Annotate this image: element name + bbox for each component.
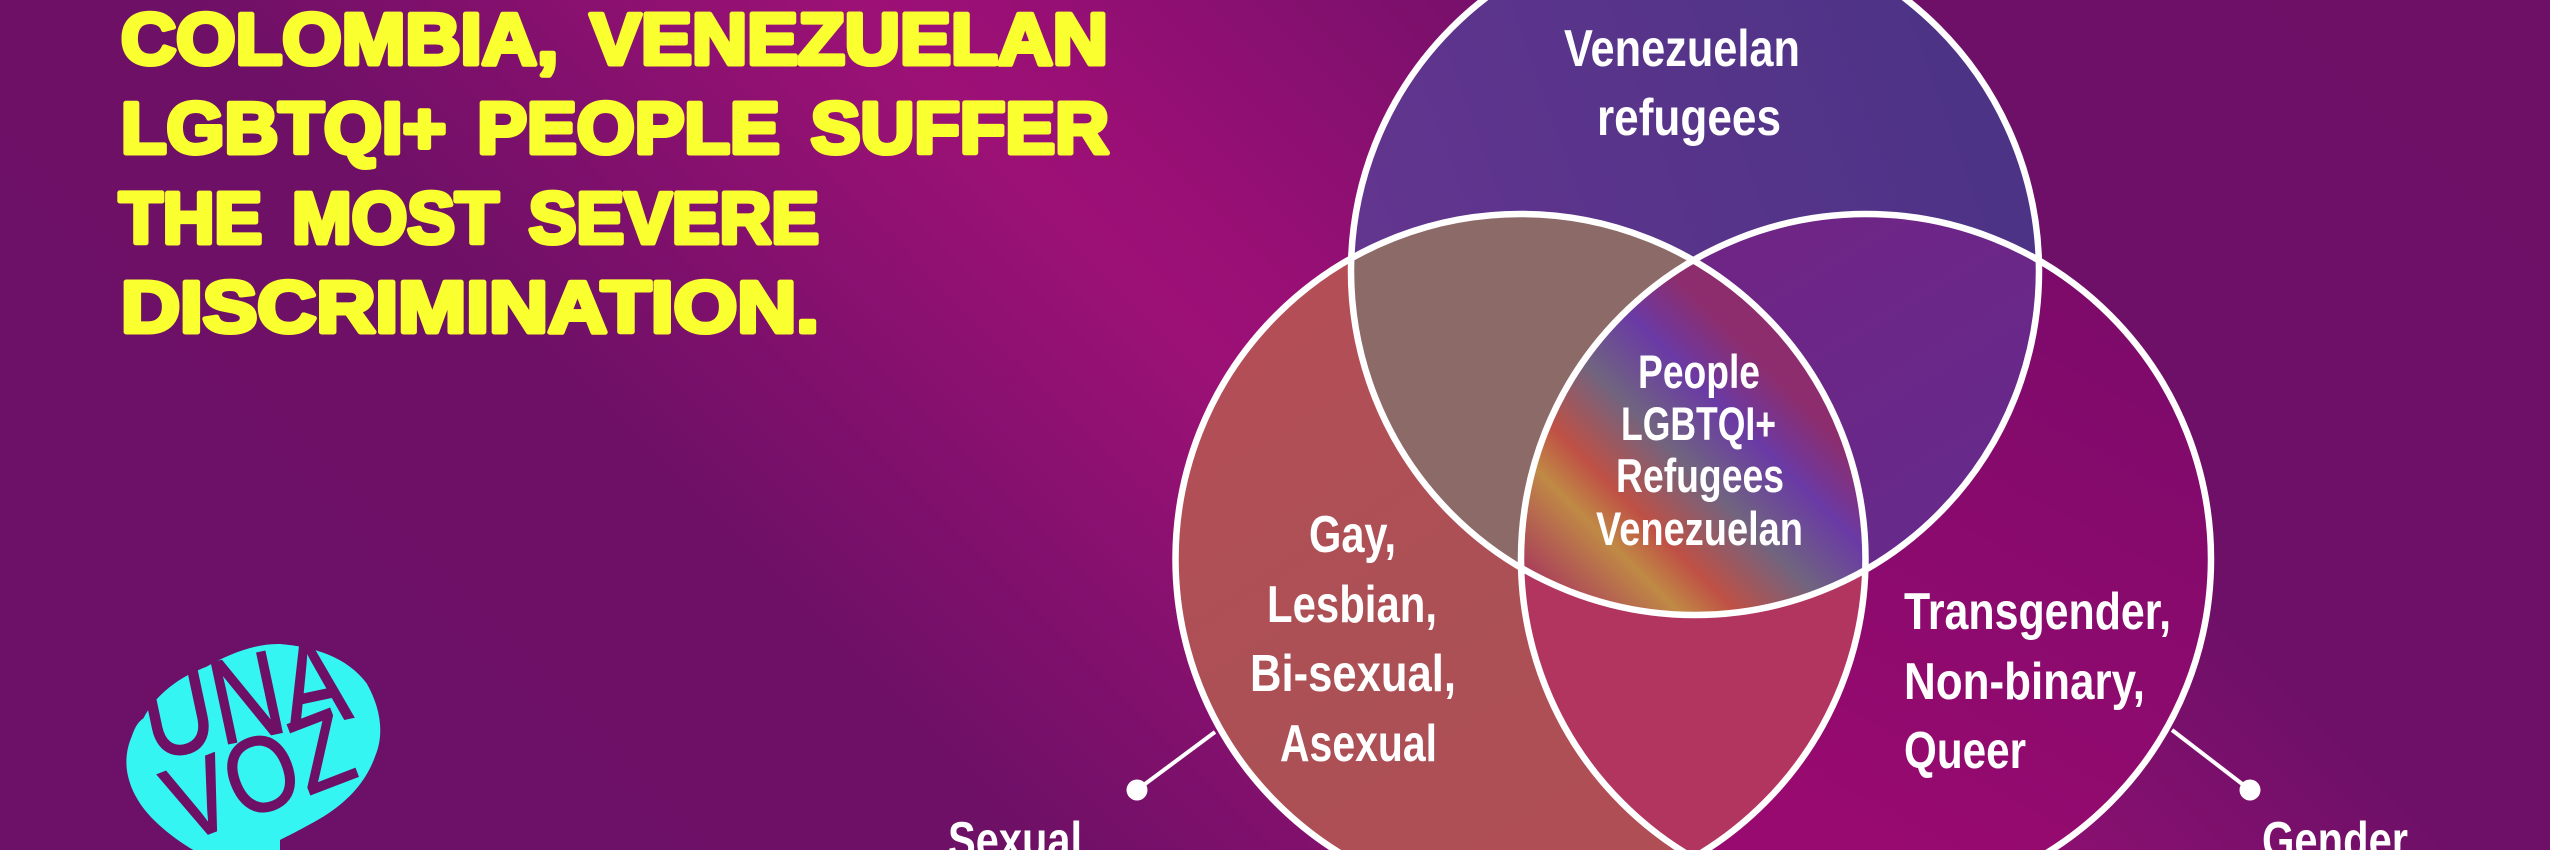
label: centre intersection: People <box>1638 345 1760 398</box>
label: sexual orientation groups <box>1250 506 1456 773</box>
circle outlines <box>1176 0 2211 850</box>
label: Venezuelan refugees <box>1564 20 1800 147</box>
circle: Venezuelan refugees <box>1354 0 2036 256</box>
callout: sexual orientation leader <box>948 732 1215 850</box>
title: headline: COLOMBIA, VENEZUELAN <box>121 0 1108 80</box>
label: sexual orientation groups: Asexual <box>1280 715 1437 773</box>
callout: gender leader <box>2172 730 2408 850</box>
label: gender identity groups: Transgender, <box>1904 583 2171 641</box>
label: Venezuelan refugees: Venezuelan <box>1564 20 1800 78</box>
venn diagram <box>1172 0 2214 850</box>
label: gender identity groups <box>1904 583 2171 780</box>
label: Venezuelan refugees: refugees <box>1597 89 1781 147</box>
label: gender identity groups: Non-binary, <box>1904 653 2145 711</box>
label: sexual orientation groups: Gay, <box>1309 506 1396 564</box>
label: centre intersection: Refugees <box>1616 449 1784 502</box>
circle: sexual orientation <box>1178 264 1674 850</box>
title: headline: DISCRIMINATION. <box>121 268 819 348</box>
overlap: sexual orientation and gender <box>1524 574 1862 850</box>
label: sexual orientation groups: Lesbian, <box>1267 576 1437 634</box>
title: headline: LGBTQI+ PEOPLE SUFFER <box>121 89 1109 169</box>
circle: gender identity <box>1866 266 2208 850</box>
title: headline <box>119 0 1109 348</box>
label: sexual orientation groups: Bi-sexual, <box>1250 645 1456 703</box>
title: headline: THE MOST SEVERE <box>119 179 819 259</box>
overlap: refugees and sexual orientation <box>1354 217 1686 562</box>
label: centre intersection <box>1596 345 1803 555</box>
label: centre intersection: LGBTQI+ <box>1621 397 1776 450</box>
logo: Una Voz speech blob: UNA <box>129 611 359 785</box>
label: gender identity groups: Queer <box>1904 722 2026 780</box>
overlap: refugees and gender <box>1700 217 2036 564</box>
label: centre intersection: Venezuelan <box>1596 502 1803 555</box>
overlap: centre rainbow <box>1524 264 1862 612</box>
